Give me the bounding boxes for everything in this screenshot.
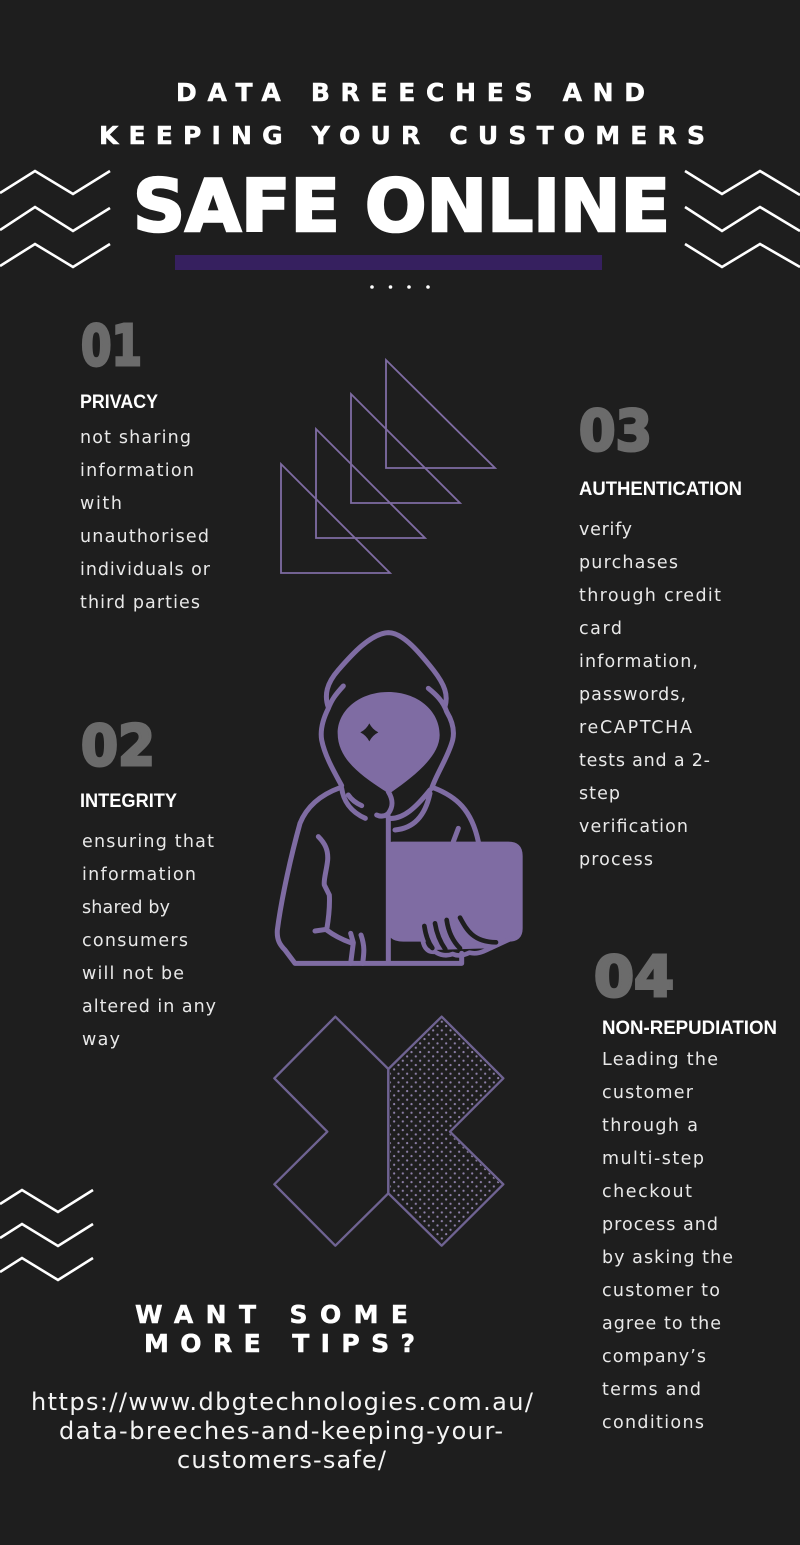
authentication description: passwords, <box>579 685 686 705</box>
heading non-repudiation: NON-REPUDIATION <box>602 1018 777 1039</box>
non-repudiation description: conditions <box>602 1413 704 1433</box>
hood <box>326 633 446 707</box>
non-repudiation description: process and <box>602 1215 718 1235</box>
authentication description: purchases <box>579 553 678 573</box>
call to action <box>31 1300 534 1474</box>
privacy description: not sharing <box>80 428 191 448</box>
decorative chevrons: top left <box>0 171 110 267</box>
icon: overlapping triangles <box>281 360 495 573</box>
heading integrity: INTEGRITY <box>80 791 177 812</box>
title line 1: DATA BREECHES AND <box>176 78 645 107</box>
panel: 04 non-repudiation <box>594 945 777 1433</box>
four dots <box>370 285 430 289</box>
authentication description <box>579 520 721 870</box>
title line 2: KEEPING YOUR CUSTOMERS <box>99 121 705 150</box>
heading authentication: AUTHENTICATION <box>579 479 742 500</box>
finger gaps <box>424 918 496 949</box>
hand <box>423 938 512 955</box>
title main: SAFE ONLINE <box>133 164 670 248</box>
non-repudiation description: by asking the <box>602 1248 733 1268</box>
icon: hooded hacker with laptop <box>277 633 523 963</box>
privacy description: unauthorised <box>80 527 209 547</box>
panel: 02 integrity <box>80 714 216 1050</box>
integrity description: shared by <box>82 898 170 918</box>
call to action: MORE TIPS? <box>144 1329 415 1358</box>
title <box>99 78 705 248</box>
icon: dotted cross shape <box>274 1017 503 1246</box>
number 04: 04 <box>594 945 674 1010</box>
number 02: 02 <box>81 714 155 779</box>
number 01: 01 <box>81 314 142 379</box>
privacy description <box>80 428 211 613</box>
heading privacy: PRIVACY <box>80 392 158 413</box>
authentication description: step <box>579 784 620 804</box>
non-repudiation description: Leading the <box>602 1050 718 1070</box>
authentication description: information, <box>579 652 698 672</box>
link url: customers-safe/ <box>177 1446 387 1474</box>
collar <box>342 788 430 830</box>
integrity description: will not be <box>82 964 184 984</box>
non-repudiation description: checkout <box>602 1182 692 1202</box>
panel: 03 authentication <box>579 399 742 870</box>
authentication description: verification <box>579 817 688 837</box>
panel: 01 privacy <box>80 314 211 613</box>
link url <box>31 1388 534 1474</box>
face sparkle <box>360 723 378 741</box>
privacy description: third parties <box>80 593 200 613</box>
authentication description: card <box>579 619 622 639</box>
link url: https://www.dbgtechnologies.com.au/ <box>31 1388 534 1416</box>
non-repudiation description: agree to the <box>602 1314 721 1334</box>
integrity description: consumers <box>82 931 188 951</box>
non-repudiation description: customer to <box>602 1281 720 1301</box>
non-repudiation description <box>602 1050 733 1433</box>
decorative chevrons: top right <box>685 171 800 267</box>
privacy description: with <box>80 494 122 514</box>
authentication description: tests and a 2- <box>579 751 710 771</box>
authentication description: through credit <box>579 586 721 606</box>
cross right half dotted <box>388 1017 503 1246</box>
number 03: 03 <box>579 399 652 464</box>
cross left half <box>274 1017 388 1246</box>
dotted fill <box>390 1019 501 1244</box>
privacy description: individuals or <box>80 560 211 580</box>
face <box>338 692 440 793</box>
integrity description: ensuring that <box>82 832 214 852</box>
integrity description: information <box>82 865 196 885</box>
integrity description: altered in any <box>82 997 216 1017</box>
non-repudiation description: terms and <box>602 1380 701 1400</box>
laptop <box>386 842 523 942</box>
link url: data-breeches-and-keeping-your- <box>59 1417 503 1445</box>
integrity description <box>82 832 216 1050</box>
non-repudiation description: through a <box>602 1116 698 1136</box>
authentication description: reCAPTCHA <box>579 718 692 738</box>
heading want some more tips: WANT SOME <box>135 1300 408 1329</box>
body <box>277 788 478 963</box>
decorative chevrons: bottom left <box>0 1190 93 1280</box>
non-repudiation description: company’s <box>602 1347 706 1367</box>
title underline bar <box>175 255 602 270</box>
arm <box>315 837 364 963</box>
authentication description: process <box>579 850 653 870</box>
integrity description: way <box>82 1030 120 1050</box>
privacy description: information <box>80 461 194 481</box>
non-repudiation description: customer <box>602 1083 694 1103</box>
authentication description: verify <box>579 520 632 540</box>
non-repudiation description: multi-step <box>602 1149 704 1169</box>
